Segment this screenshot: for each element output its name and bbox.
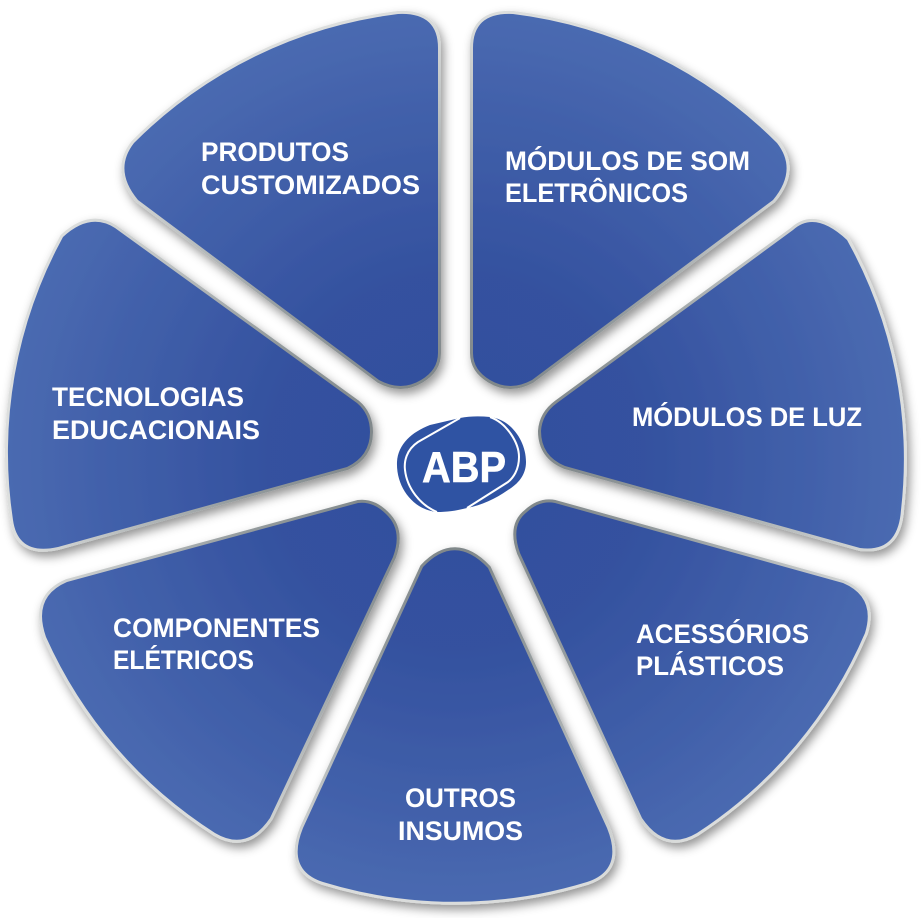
label: ACESSÓRIOS xyxy=(636,619,809,649)
label: ELETRÔNICOS xyxy=(505,178,688,208)
wedge shape xyxy=(124,14,438,386)
wedge shape xyxy=(473,14,787,386)
label xyxy=(636,619,809,681)
panel: modulos de luz xyxy=(541,222,904,549)
logo blob xyxy=(397,416,526,512)
logo: ABP xyxy=(397,416,526,512)
label: INSUMOS xyxy=(398,816,523,846)
label: MÓDULOS DE SOM xyxy=(505,146,750,176)
wedge shape xyxy=(298,550,612,902)
wedge shape xyxy=(516,502,868,840)
panel: produtos customizados xyxy=(124,14,438,386)
label: PRODUTOS xyxy=(201,137,349,167)
wedge shape xyxy=(42,503,397,840)
label: OUTROS xyxy=(405,783,516,813)
panel: outros insumos xyxy=(298,550,612,902)
label: CUSTOMIZADOS xyxy=(201,170,420,200)
label xyxy=(113,613,320,675)
panel: componentes eletricos xyxy=(42,503,397,840)
label: PLÁSTICOS xyxy=(636,651,784,681)
label: ELÉTRICOS xyxy=(113,645,254,675)
label xyxy=(201,137,420,200)
label xyxy=(52,382,260,445)
label: EDUCACIONAIS xyxy=(52,415,260,445)
label xyxy=(505,146,750,208)
logo inner outline xyxy=(405,417,519,512)
wedge shape xyxy=(8,222,370,549)
panel: tecnologias educacionais xyxy=(8,222,370,549)
wedge shape xyxy=(541,222,904,549)
label: TECNOLOGIAS xyxy=(52,382,244,412)
label: MÓDULOS DE LUZ xyxy=(632,402,862,432)
panel: modulos de som eletronicos xyxy=(473,14,787,386)
label xyxy=(398,783,523,846)
label: COMPONENTES xyxy=(113,613,320,643)
panel: acessorios plasticos xyxy=(516,502,868,840)
logo text: ABP xyxy=(422,443,506,492)
